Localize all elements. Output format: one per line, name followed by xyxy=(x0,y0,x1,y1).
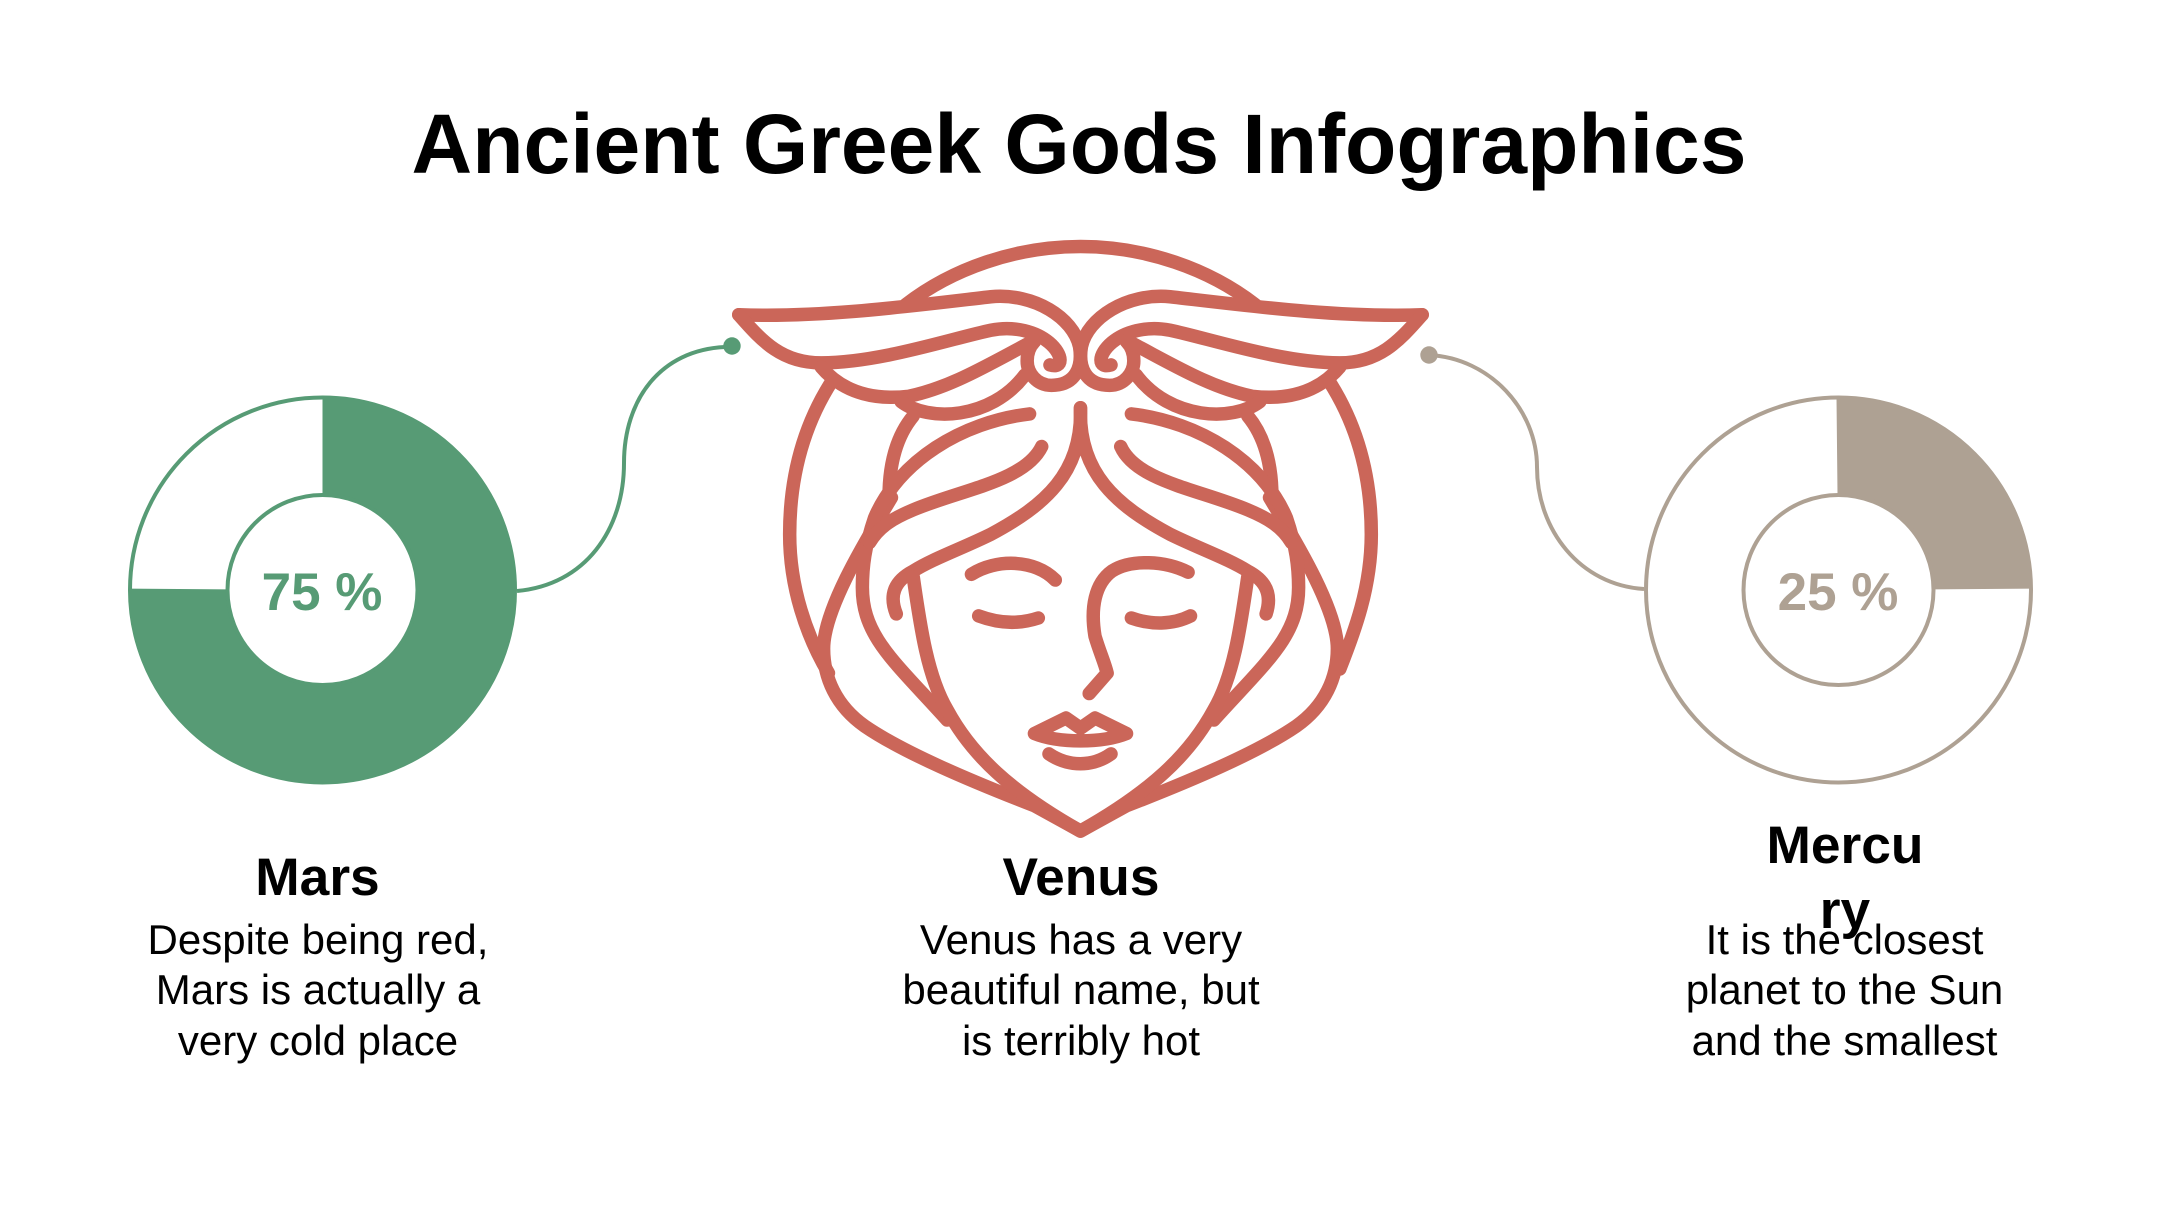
donut chart: Mars 75% xyxy=(130,398,515,782)
heading: Mercury: ry xyxy=(1820,881,1871,940)
text block: Venus description: is terribly hot xyxy=(962,1017,1200,1064)
text block: Mercury description: and the smallest xyxy=(1692,1017,1998,1064)
text block: Mars description: very cold place xyxy=(178,1017,458,1064)
connector: Mars donut to goddess xyxy=(517,337,741,591)
value: Mars percentage: 75 % xyxy=(262,563,382,622)
text block: Mars description: Despite being red, xyxy=(148,916,488,963)
text block: Venus description xyxy=(902,916,1260,1064)
value: Mercury percentage: 25 % xyxy=(1778,563,1898,622)
donut chart: Mercury 25% xyxy=(1646,398,2031,782)
icon: goddess head line art xyxy=(739,247,1422,831)
text block: Venus description: beautiful name, but xyxy=(902,966,1260,1013)
text block: Mercury description xyxy=(1686,916,2003,1064)
text block: Mercury description: planet to the Sun xyxy=(1686,966,2003,1013)
heading: Mercury: Mercu xyxy=(1767,816,1923,875)
heading: Mars: Mars xyxy=(255,848,380,907)
title: Ancient Greek Gods Infographics xyxy=(412,97,1746,191)
text block: Venus description: Venus has a very xyxy=(920,916,1242,963)
heading: Venus: Venus xyxy=(1002,848,1160,907)
connector: Mercury donut to goddess xyxy=(1420,346,1644,589)
heading: Mercury xyxy=(1767,816,1923,940)
text block: Mars description: Mars is actually a xyxy=(156,966,481,1013)
text block: Mars description xyxy=(148,916,488,1064)
text block: Mercury description: It is the closest xyxy=(1706,916,1984,963)
